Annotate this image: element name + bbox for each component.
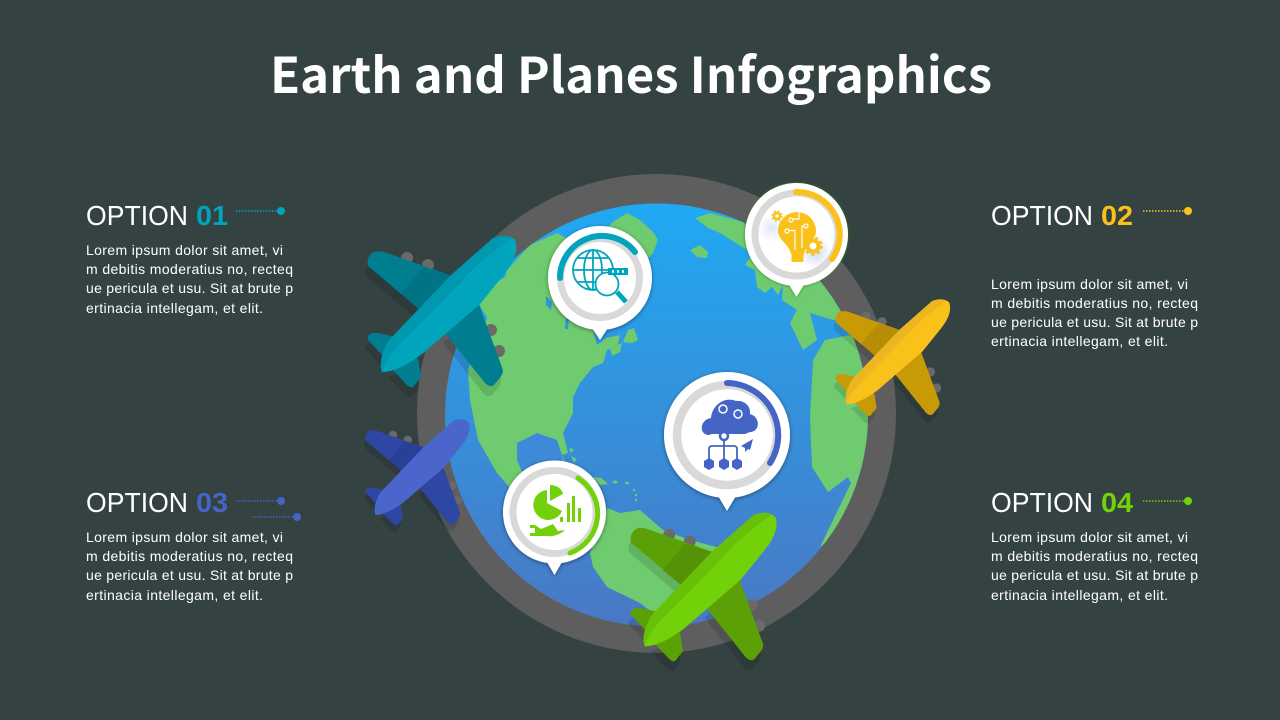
connectors [236,497,301,521]
description: ue pericula et usu. Sit at brute p [991,314,1198,330]
heading: OPTION [991,487,1093,518]
icon: pie chart and hand [530,485,581,536]
connector [1143,207,1192,215]
pin body [503,460,606,575]
heading: OPTION [86,487,188,518]
globe outer ring [417,174,896,653]
heading: 01 [196,200,228,231]
plane: blue [364,419,470,532]
heading: 03 [196,487,228,518]
glow [758,214,831,268]
description: ue pericula et usu. Sit at brute p [991,567,1198,583]
progress ring [755,193,838,276]
progress ring [513,470,596,554]
pin body [664,372,790,511]
icon: cloud network [702,400,758,470]
description: m debitis moderatius no, recteq [991,295,1198,311]
plane: yellow [834,299,950,424]
plane: green [629,513,776,671]
option 03 [86,487,301,603]
description [991,276,1198,349]
description: ue pericula et usu. Sit at brute p [86,280,293,296]
description: Lorem ipsum dolor sit amet, vi [86,242,283,258]
heading: 02 [1101,200,1133,231]
description: m debitis moderatius no, recteq [991,548,1198,564]
pin: pie chart [503,460,606,575]
description: ertinacia intellegam, et elit. [86,300,263,316]
description [86,529,293,603]
description: m debitis moderatius no, recteq [86,548,293,564]
plane: teal [366,236,516,397]
earth globe [417,174,896,653]
progress ring [677,385,777,485]
icon: bulb with gears [772,211,822,262]
pin: cloud network [664,372,790,511]
description: ertinacia intellegam, et elit. [991,587,1168,603]
title: Earth and Planes Infographics [270,37,992,108]
pin body [548,226,652,340]
description [86,242,293,316]
description: Lorem ipsum dolor sit amet, vi [991,529,1188,545]
description: ertinacia intellegam, et elit. [991,333,1168,349]
connector [236,207,285,215]
option 04 [991,487,1198,603]
pin body [745,183,848,297]
heading: OPTION [86,200,188,231]
icon: globe and magnifier [573,250,628,302]
pin: globe search [548,226,652,340]
description: Lorem ipsum dolor sit amet, vi [86,529,283,545]
progress ring [560,238,640,318]
pin: lightbulb [745,183,848,297]
heading: OPTION [991,200,1093,231]
description: ertinacia intellegam, et elit. [86,587,263,603]
ocean [445,204,868,626]
heading: 04 [1101,487,1133,518]
description [991,529,1198,603]
continents [468,213,880,622]
description: Lorem ipsum dolor sit amet, vi [991,276,1188,292]
option 02 [991,200,1198,349]
connector [1143,497,1192,505]
description: m debitis moderatius no, recteq [86,261,293,277]
description: ue pericula et usu. Sit at brute p [86,567,293,583]
option 01 [86,200,293,316]
